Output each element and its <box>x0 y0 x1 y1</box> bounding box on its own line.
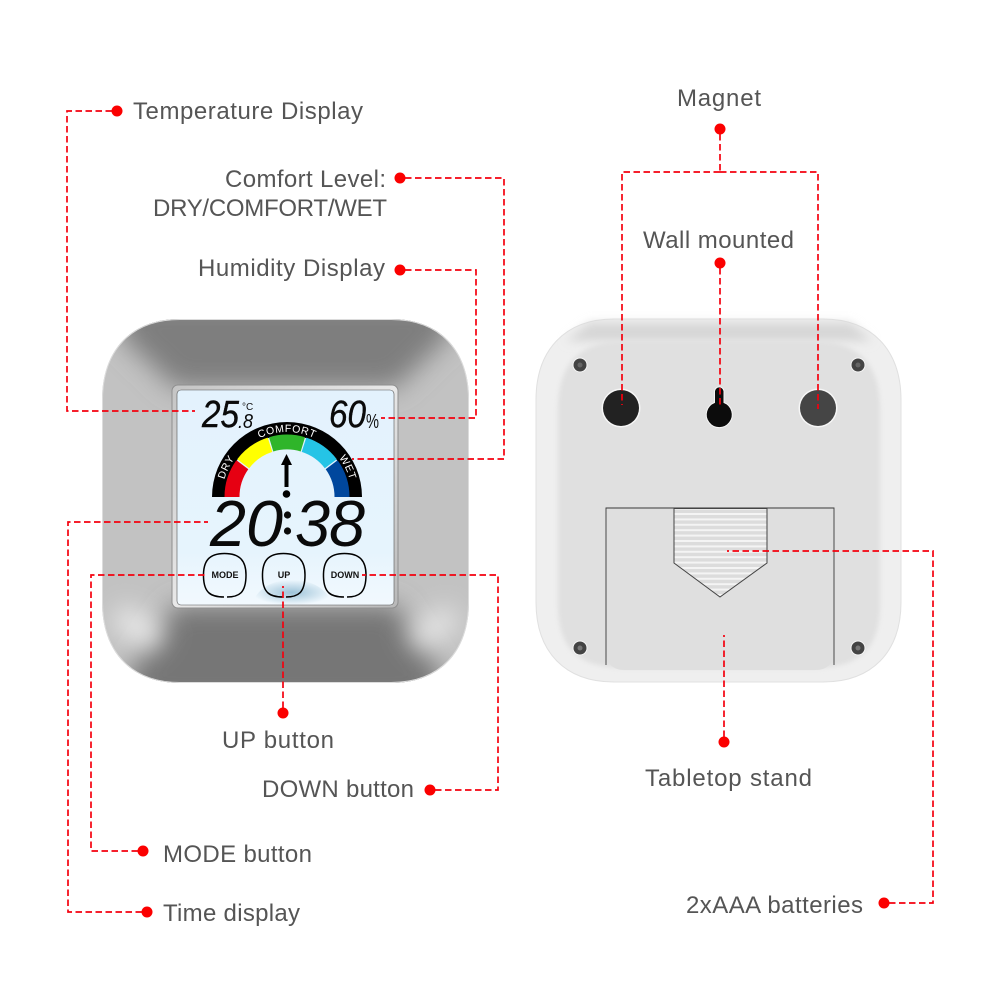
label: batteries: 2xAAA batteries <box>686 892 863 919</box>
label: temperature display: Temperature Display <box>133 98 363 125</box>
gauge label: dry: DRY <box>218 454 233 479</box>
right magnet <box>798 388 838 428</box>
label: wall mounted: Wall mounted <box>643 227 794 254</box>
device: back view <box>536 319 901 682</box>
left magnet <box>602 388 640 428</box>
label: up button: UP button <box>222 727 334 754</box>
infographic canvas <box>66 90 934 926</box>
screws <box>572 358 866 656</box>
gauge pointer <box>281 454 292 498</box>
gauge label: comfort: COMFORT <box>258 424 317 437</box>
MODE touch button <box>203 554 246 597</box>
screen bezel <box>172 385 398 608</box>
colour band: blue <box>326 460 350 497</box>
colour band: red <box>224 460 248 497</box>
colour band: yellow <box>237 438 272 468</box>
ribbed stand tab <box>674 508 767 597</box>
black gauge ring <box>212 422 362 497</box>
label: mode button: MODE button <box>163 841 312 868</box>
callout dots <box>112 106 890 918</box>
colour band: green <box>269 435 305 452</box>
keyhole wall mount <box>706 387 732 428</box>
time reading: 0 <box>246 487 283 560</box>
battery door edge <box>606 508 834 665</box>
device: front view <box>102 319 469 683</box>
UP touch button: UP <box>278 570 290 580</box>
label: comfort level: Comfort Level: <box>225 166 386 193</box>
humidity reading: 60 <box>329 394 366 436</box>
time reading <box>209 487 365 560</box>
label: humidity display: Humidity Display <box>198 255 385 282</box>
device body silver frame <box>102 319 469 683</box>
label: magnet: Magnet <box>677 85 761 112</box>
LCD screen <box>177 390 394 605</box>
temperature reading: 25 <box>201 394 240 436</box>
DOWN touch button: DOWN <box>331 570 359 580</box>
callout lines <box>67 111 933 912</box>
colour band: cyan <box>302 438 337 468</box>
time reading: 3 <box>295 487 330 560</box>
battery door <box>605 507 834 670</box>
back shell <box>536 319 901 682</box>
label: time display: Time display <box>163 900 300 927</box>
temperature reading: °C <box>242 402 253 413</box>
back top shade <box>566 323 872 341</box>
touch glow <box>252 580 332 605</box>
comfort gauge <box>212 422 362 498</box>
humidity reading: % <box>366 411 379 433</box>
back inner plate <box>558 341 880 668</box>
time reading: 2 <box>209 487 246 560</box>
gauge label: wet: WET <box>340 454 356 478</box>
label: down button: DOWN button <box>262 776 414 803</box>
UP touch button <box>262 554 305 597</box>
label: comfort states: DRY/COMFORT/WET <box>153 195 387 222</box>
MODE touch button: MODE <box>212 570 238 580</box>
temperature reading: .8 <box>238 411 253 433</box>
DOWN touch button <box>323 554 366 597</box>
label: tabletop stand: Tabletop stand <box>645 765 812 792</box>
time reading: 8 <box>329 487 365 560</box>
